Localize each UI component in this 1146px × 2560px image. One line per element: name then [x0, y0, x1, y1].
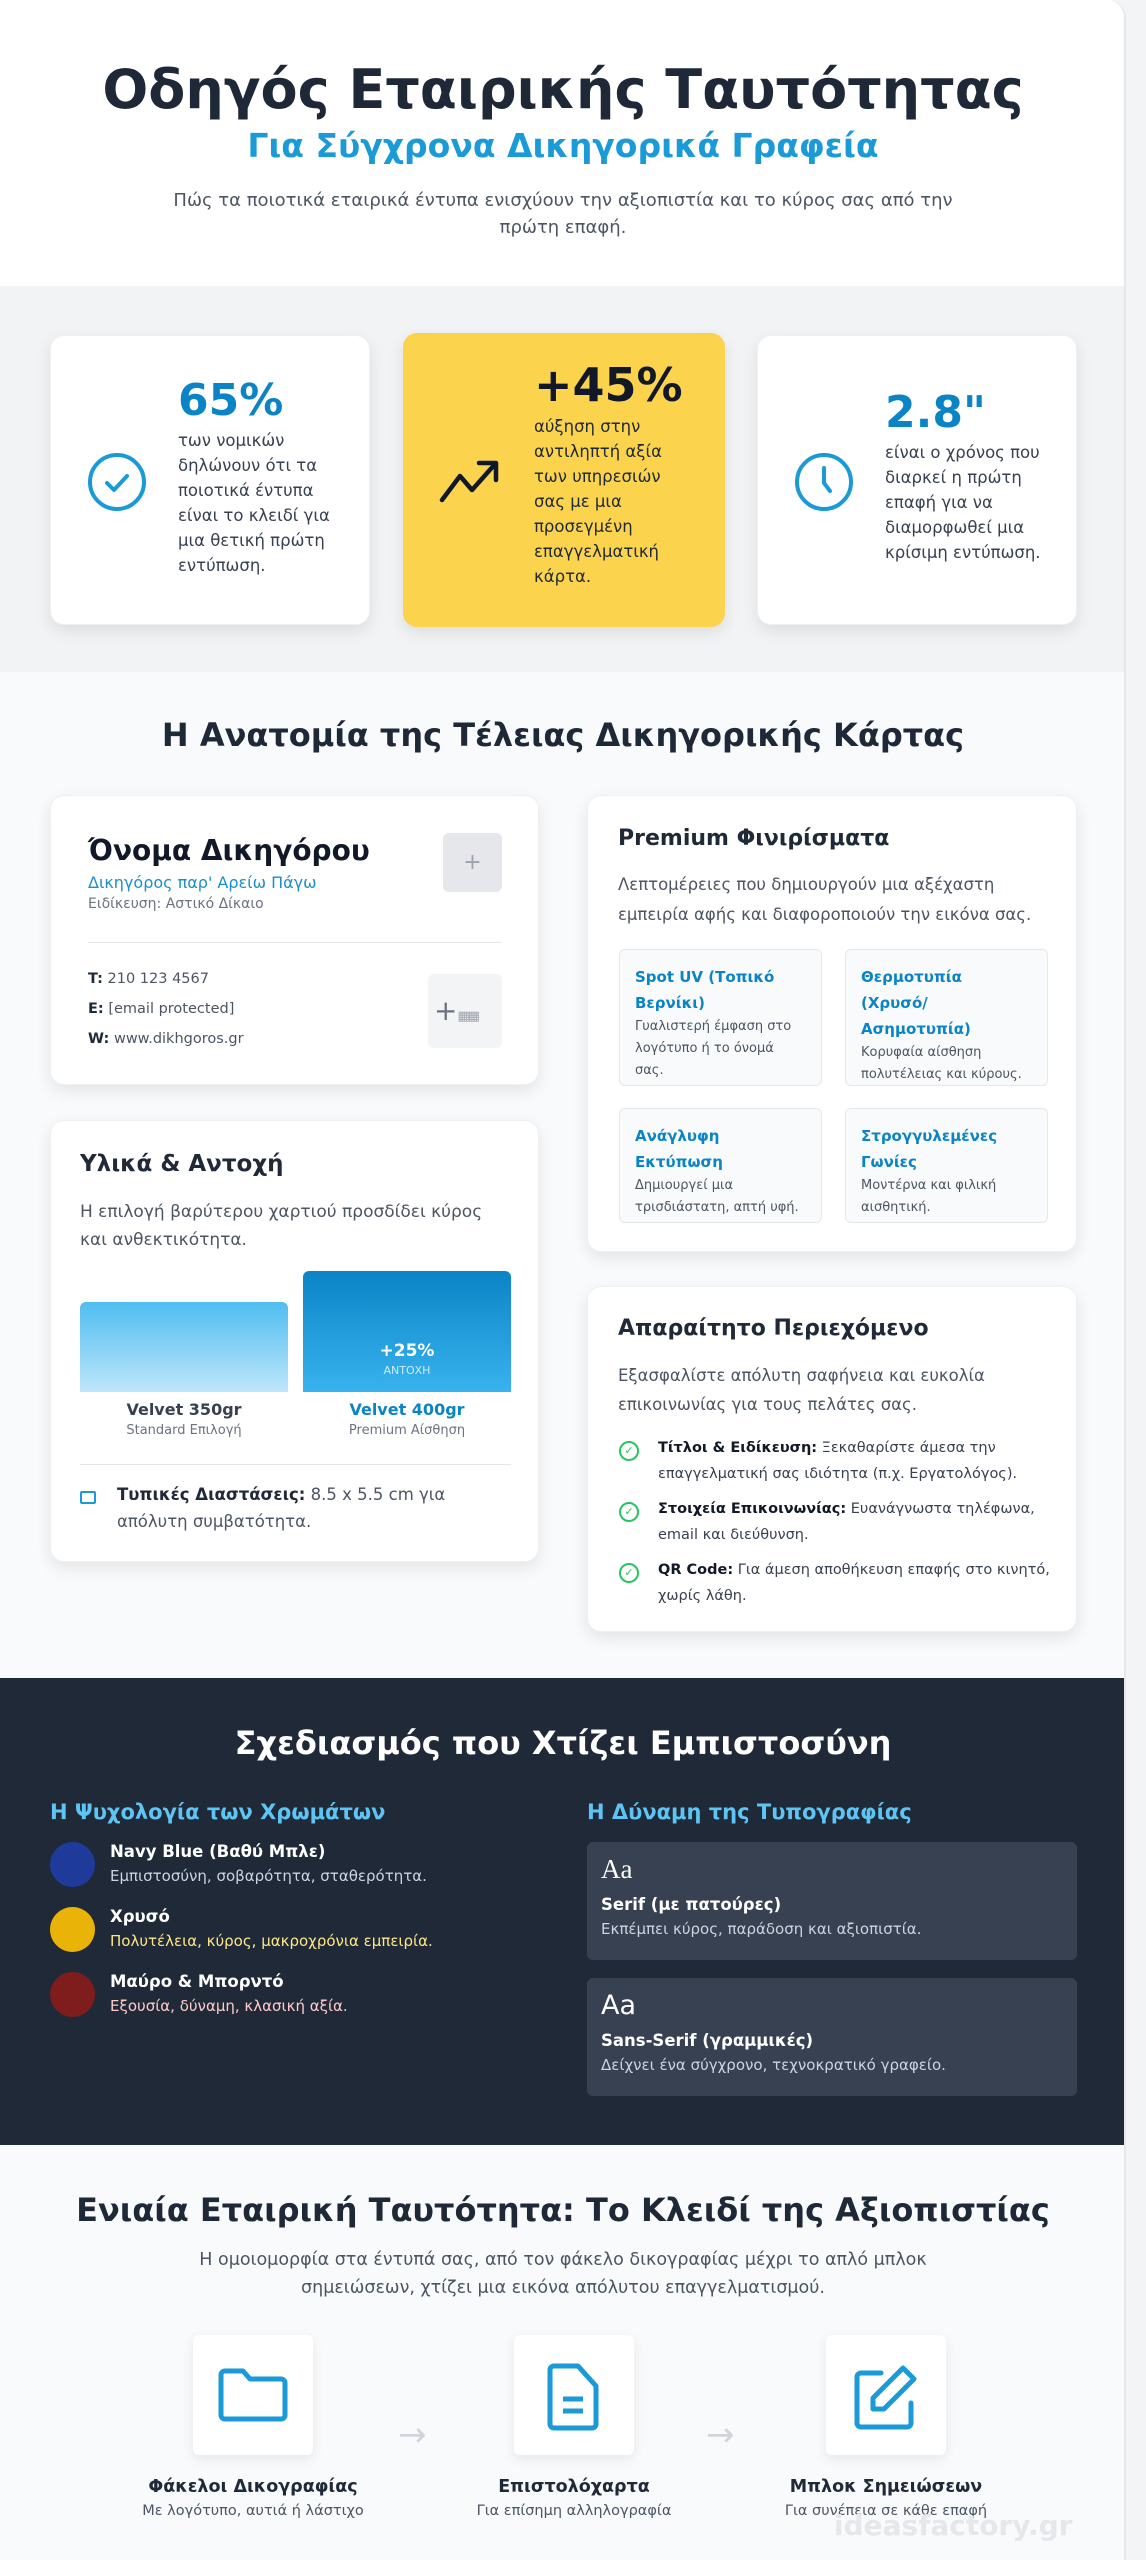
stat text: +45%: [534, 358, 683, 412]
item: folders: Φάκελοι Δικογραφίας: [148, 2477, 358, 2497]
name block: Όνομα Δικηγόρου: [88, 834, 370, 867]
heading: Υλικά & Αντοχή: [80, 1151, 284, 1177]
color: navy: Εμπιστοσύνη, σοβαρότητα, σταθερότητα.: [110, 1867, 427, 1885]
type: serif: Serif (με πατούρες): [601, 1895, 781, 1914]
heading: Ενιαία Εταιρική Ταυτότητα: Το Κλειδί της Αξιοπιστίας: [76, 2191, 1050, 2229]
logo placeholder: [443, 833, 502, 892]
business card mockup: [50, 795, 539, 1085]
materials card: [50, 1120, 539, 1562]
finish: embossing: [619, 1108, 822, 1223]
item: notepads: Για συνέπεια σε κάθε επαφή: [785, 2503, 987, 2519]
finish: hot foil: [845, 949, 1048, 1086]
checklist: QR Code: Για άμεση αποθήκευση επαφής στο κινητό, χωρίς λάθη.: [658, 1562, 1050, 1604]
item: folders: [142, 2349, 364, 2519]
stat card 65%: [50, 335, 370, 625]
icon: check circle: [88, 453, 146, 511]
item: letterhead: [477, 2349, 671, 2519]
arrow: →: [706, 2415, 734, 2455]
stat card +45%: [403, 333, 725, 627]
dark section: design trust: [0, 1678, 1126, 2145]
description: Η ομοιομορφία στα έντυπά σας, από τον φάκελο δικογραφίας μέχρι το απλό μπλοκ σημειώσεων, χτίζει μια εικόνα απόλυτου επαγγελματισμού.: [199, 2250, 927, 2298]
arrow: →: [398, 2415, 426, 2455]
type: sans: Aa: [601, 1990, 636, 2021]
qr placeholder: +▦▦: [434, 994, 478, 1027]
stat text: είναι ο χρόνος που διαρκεί η πρώτη επαφή για να διαμορφωθεί μια κρίσιμη εντύπωση.: [885, 443, 1041, 562]
bar chart: ΑΝΤΟΧΗ: [384, 1364, 430, 1377]
type: sans: Δείχνει ένα σύγχρονο, τεχνοκρατικό γραφείο.: [601, 2056, 946, 2074]
finish: embossing: Δημιουργεί μια τρισδιάστατη, απτή υφή.: [635, 1178, 799, 1215]
stat text: αύξηση στην αντιληπτή αξία των υπηρεσιών σας με μια προσεγμένη επαγγελματική κάρτα.: [534, 417, 662, 586]
title: Οδηγός Εταιρικής Ταυτότητας: [102, 58, 1024, 121]
stat text: των νομικών δηλώνουν ότι τα ποιοτικά έντυπα είναι το κλειδί για μια θετική πρώτη εντύπωση.: [178, 431, 330, 575]
bar chart: Velvet 350gr: [126, 1400, 242, 1419]
bar chart: [80, 1271, 511, 1438]
color: navy: Navy Blue (Βαθύ Μπλε): [110, 1842, 325, 1861]
checklist: Τίτλοι & Ειδίκευση: Ξεκαθαρίστε άμεσα την επαγγελματική σας ιδιότητα (π.χ. Εργατολόγος).: [658, 1440, 1017, 1482]
icon: clock: [795, 453, 853, 511]
finish: hot foil: Κορυφαία αίσθηση πολυτέλειας και κύρους.: [861, 1045, 1022, 1082]
checklist: Στοιχεία Επικοινωνίας: Ευανάγνωστα τηλέφωνα, email και διεύθυνση.: [658, 1501, 1035, 1543]
color: burgundy: [50, 1972, 348, 2017]
item: notepads: [785, 2349, 987, 2519]
stats section: [0, 286, 1126, 672]
materials card: Premium Αίσθηση: [349, 1423, 465, 1438]
type: serif: Aa: [601, 1854, 632, 1884]
colors column: Η Ψυχολογία των Χρωμάτων: [50, 1800, 385, 1824]
item: letterhead: Για επίσημη αλληλογραφία: [477, 2503, 671, 2519]
description: Λεπτομέρειες που δημιουργούν μια αξέχαστη εμπειρία αφής και διαφοροποιούν την εικόνα σας.: [618, 875, 1031, 924]
stat text: [885, 387, 1041, 562]
checklist: ✓: [624, 1505, 634, 1518]
finish: rounded corners: Μοντέρνα και φιλική αισθητική.: [861, 1178, 996, 1215]
essential content card: [587, 1286, 1077, 1632]
checklist: [619, 1440, 1050, 1604]
typography column: [587, 1800, 1077, 2096]
watermark: ideasfactory.gr: [834, 2509, 1072, 2542]
colors column: [50, 1800, 433, 2017]
bar chart: +25%: [380, 1341, 434, 1361]
bar chart: Velvet 400gr: [349, 1400, 465, 1419]
finish: rounded corners: Στρογγυλεμένες Γωνίες: [861, 1127, 997, 1171]
color: gold: [50, 1907, 433, 1952]
color: burgundy: Μαύρο & Μπορντό: [110, 1972, 284, 1991]
materials card: Standard Επιλογή: [126, 1423, 242, 1438]
unified identity section: [0, 2145, 1126, 2560]
heading: Σχεδιασμός που Χτίζει Εμπιστοσύνη: [235, 1724, 891, 1762]
finish: embossing: Ανάγλυφη Εκτύπωση: [635, 1127, 723, 1171]
typography column: Η Δύναμη της Τυπογραφίας: [587, 1800, 912, 1824]
stat text: 65%: [178, 375, 283, 426]
item: folders: Με λογότυπο, αυτιά ή λάστιχο: [142, 2503, 364, 2519]
heading: Premium Φινιρίσματα: [618, 826, 889, 851]
contact info: T: 210 123 4567: [88, 971, 209, 987]
anatomy section: [0, 672, 1126, 1678]
finish: spot uv: [619, 949, 822, 1086]
contact info: [88, 971, 244, 1047]
icon: trend arrow: [440, 460, 498, 502]
stat text: 2.8": [885, 387, 986, 438]
logo placeholder: +: [463, 850, 482, 875]
color: gold: Πολυτέλεια, κύρος, μακροχρόνια εμπειρία.: [110, 1932, 433, 1950]
name block: Δικηγόρος παρ' Αρείω Πάγω: [88, 873, 317, 892]
subtitle: Για Σύγχρονα Δικηγορικά Γραφεία: [247, 126, 879, 165]
heading: Απαραίτητο Περιεχόμενο: [618, 1316, 929, 1341]
section heading: Η Ανατομία της Τέλειας Δικηγορικής Κάρτας: [162, 716, 964, 754]
contact info: W: www.dikhgoros.gr: [88, 1031, 244, 1047]
intro text: Πώς τα ποιοτικά εταιρικά έντυπα ενισχύουν την αξιοπιστία και το κύρος σας από την πρώτη επαφή.: [173, 190, 953, 238]
color: burgundy: Εξουσία, δύναμη, κλασική αξία.: [110, 1997, 348, 2015]
description: Εξασφαλίστε απόλυτη σαφήνεια και ευκολία επικοινωνίας για τους πελάτες σας.: [618, 1366, 985, 1414]
contact info: E: [email protected]: [88, 1001, 234, 1017]
description: Η επιλογή βαρύτερου χαρτιού προσδίδει κύρος και ανθεκτικότητα.: [80, 1202, 482, 1250]
stat text: [534, 358, 683, 586]
name block: Ειδίκευση: Αστικό Δίκαιο: [88, 896, 264, 912]
finish: spot uv: Γυαλιστερή έμφαση στο λογότυπο ή το όνομά σας.: [635, 1019, 791, 1078]
color: navy: [50, 1842, 427, 1887]
checklist: ✓: [624, 1444, 634, 1457]
header: [0, 0, 1126, 286]
color: gold: Χρυσό: [110, 1907, 170, 1926]
type: sans: Sans-Serif (γραμμικές): [601, 2031, 813, 2050]
type: serif: [587, 1842, 1077, 1960]
name block: [88, 834, 370, 912]
premium finishes card: [587, 795, 1077, 1252]
item: notepads: Μπλοκ Σημειώσεων: [790, 2477, 982, 2497]
stat card 2.8": [757, 335, 1077, 625]
finish: hot foil: Θερμοτυπία (Χρυσό/ Ασημοτυπία): [861, 968, 971, 1038]
qr placeholder: [428, 974, 502, 1048]
finish: rounded corners: [845, 1108, 1048, 1223]
type: serif: Εκπέμπει κύρος, παράδοση και αξιοπιστία.: [601, 1920, 921, 1938]
dimensions note: Τυπικές Διαστάσεις: 8.5 x 5.5 cm για απόλυτη συμβατότητα.: [117, 1485, 445, 1531]
finish: spot uv: Spot UV (Τοπικό Βερνίκι): [635, 968, 774, 1012]
type: sans: [587, 1978, 1077, 2096]
item: letterhead: Επιστολόχαρτα: [498, 2477, 650, 2497]
checklist: ✓: [624, 1566, 634, 1579]
